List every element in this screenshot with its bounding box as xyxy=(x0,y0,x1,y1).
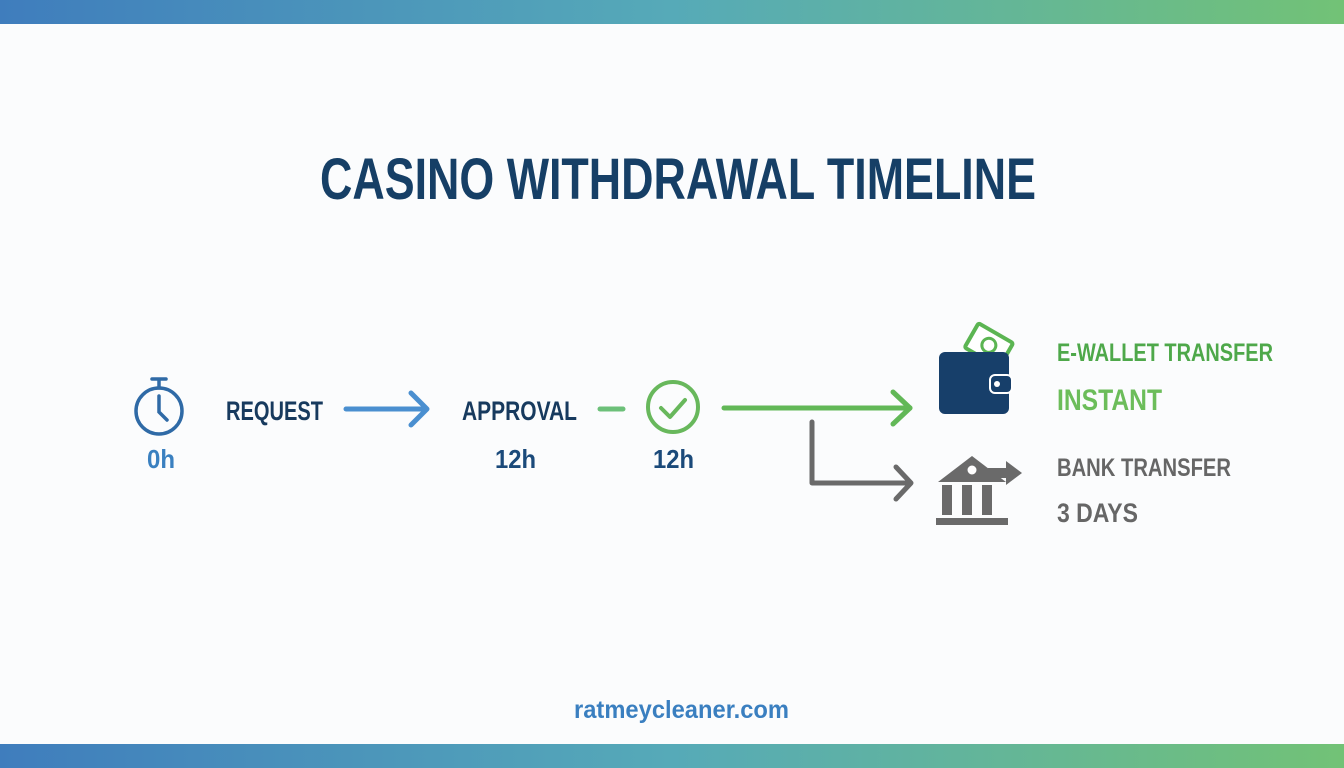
icon: stopwatch xyxy=(136,379,182,434)
text: e-wallet transfer: E-WALLET TRANSFER xyxy=(1057,339,1273,367)
text: instant: INSTANT xyxy=(1057,384,1162,417)
icon: bank xyxy=(936,456,1022,525)
icon: wallet xyxy=(939,323,1013,414)
arrow: to bank xyxy=(812,422,911,499)
label: approval 12h: 12h xyxy=(495,444,536,474)
arrow: to e-wallet xyxy=(724,392,910,424)
arrow: request to approval xyxy=(346,393,427,425)
footer url: ratmeycleaner.com xyxy=(574,696,789,724)
label: approval: APPROVAL xyxy=(462,396,577,426)
dash connector xyxy=(600,406,623,412)
label: check 12h: 12h xyxy=(653,444,694,474)
title: CASINO WITHDRAWAL TIMELINE xyxy=(320,147,1036,212)
bottom gradient bar xyxy=(0,744,1344,768)
label: request: REQUEST xyxy=(226,396,323,426)
text: 3 days: 3 DAYS xyxy=(1057,498,1138,528)
text: bank transfer: BANK TRANSFER xyxy=(1057,454,1231,482)
label: 0h: 0h xyxy=(147,444,175,474)
icon: check circle xyxy=(648,382,698,432)
top gradient bar xyxy=(0,0,1344,24)
